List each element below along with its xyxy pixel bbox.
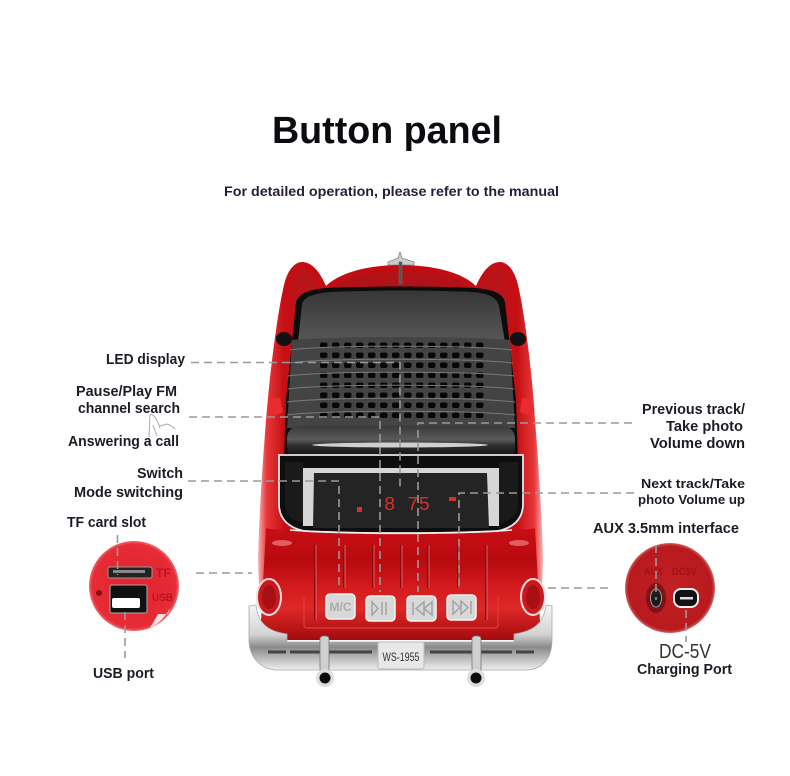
leader line: right port panel <box>548 587 612 589</box>
TF slot <box>108 567 152 578</box>
button: play pause <box>366 596 395 621</box>
button recess <box>304 597 498 628</box>
leader line: LED display <box>191 362 400 490</box>
FM marker <box>449 497 456 501</box>
status dot <box>96 590 102 596</box>
leader line: previous track <box>418 423 632 592</box>
button: previous <box>407 596 436 621</box>
button: mode: M/C <box>330 600 352 614</box>
DC mark: DC5V <box>672 566 698 578</box>
subtitle: For detailed operation, please refer to the manual <box>224 183 559 199</box>
TF leader <box>116 535 118 575</box>
body ribs <box>315 545 486 620</box>
label: pause play: Pause/Play FM <box>76 384 177 400</box>
rear deck <box>260 528 541 640</box>
exhaust right <box>467 636 485 687</box>
DC socket <box>674 589 698 607</box>
chipped corner <box>150 608 170 628</box>
label: charging port: Charging Port <box>637 662 732 678</box>
mirror right <box>510 332 526 346</box>
roof panel <box>298 290 505 342</box>
AUX leader <box>655 545 657 600</box>
button: mode <box>326 594 355 619</box>
title: Button panel <box>272 110 502 152</box>
side lug right <box>520 398 534 415</box>
exhaust left <box>316 636 334 687</box>
license plate: WS-1955 <box>382 650 420 664</box>
label: TF card slot: TF card slot <box>67 515 146 531</box>
button: next <box>447 595 476 620</box>
deck highlight right <box>509 540 529 546</box>
label: LED display: LED display <box>106 352 185 368</box>
label: switch <box>74 466 183 501</box>
rear window <box>279 455 523 533</box>
AUX jack <box>646 583 666 613</box>
label: previous track: Previous track/ <box>642 402 745 418</box>
license plate <box>378 642 424 669</box>
label: switch: Switch <box>137 466 183 482</box>
car body <box>258 262 543 610</box>
speaker grille <box>287 337 515 428</box>
bumper <box>249 605 552 670</box>
inset: TF and USB ports <box>89 541 179 631</box>
inset: AUX and DC ports <box>625 543 715 633</box>
scribble mark <box>149 414 175 437</box>
tail light left <box>257 579 281 615</box>
AUX mark: AUX <box>644 566 664 578</box>
label: previous track <box>642 402 745 452</box>
label: previous track: Take photo <box>666 419 743 435</box>
pause marker <box>357 507 362 512</box>
tail light right <box>521 579 545 615</box>
label: pause play <box>68 384 180 450</box>
leader line: next track <box>459 493 634 590</box>
rib highlights <box>316 545 487 620</box>
deck highlight left <box>272 540 292 546</box>
label: pause play: Answering a call <box>68 434 179 450</box>
label: DC-5V: DC-5V <box>659 641 712 663</box>
label: USB port: USB port <box>93 666 154 682</box>
leader line: left port panel <box>196 572 252 574</box>
hood highlight <box>332 272 470 288</box>
hood ornament <box>388 252 414 284</box>
label: next track <box>638 476 745 507</box>
USB mark: USB <box>152 592 173 604</box>
leader line: pause play <box>189 417 380 592</box>
TF mark: TF <box>156 566 171 580</box>
spoiler <box>287 426 515 460</box>
left fin shading <box>292 268 320 310</box>
car illustration <box>249 252 552 687</box>
label: switch: Mode switching <box>74 485 183 501</box>
leader line: switch <box>188 481 339 590</box>
bumper shadow <box>268 650 534 654</box>
right fin shading <box>481 268 509 310</box>
USB leader <box>124 612 126 658</box>
DC leader <box>685 610 687 642</box>
USB socket <box>110 585 147 613</box>
label: next track: Next track/Take <box>641 476 745 491</box>
spoiler highlight <box>312 442 488 448</box>
label: previous track: Volume down <box>650 436 745 452</box>
label: AUX interface: AUX 3.5mm interface <box>593 521 739 537</box>
label: pause play: channel search <box>78 401 180 417</box>
side lug left <box>268 398 283 415</box>
cabin black <box>284 286 518 462</box>
mirror left <box>276 332 292 346</box>
label: next track: photo Volume up <box>638 492 745 507</box>
LED readout: 8 75 <box>384 494 430 516</box>
